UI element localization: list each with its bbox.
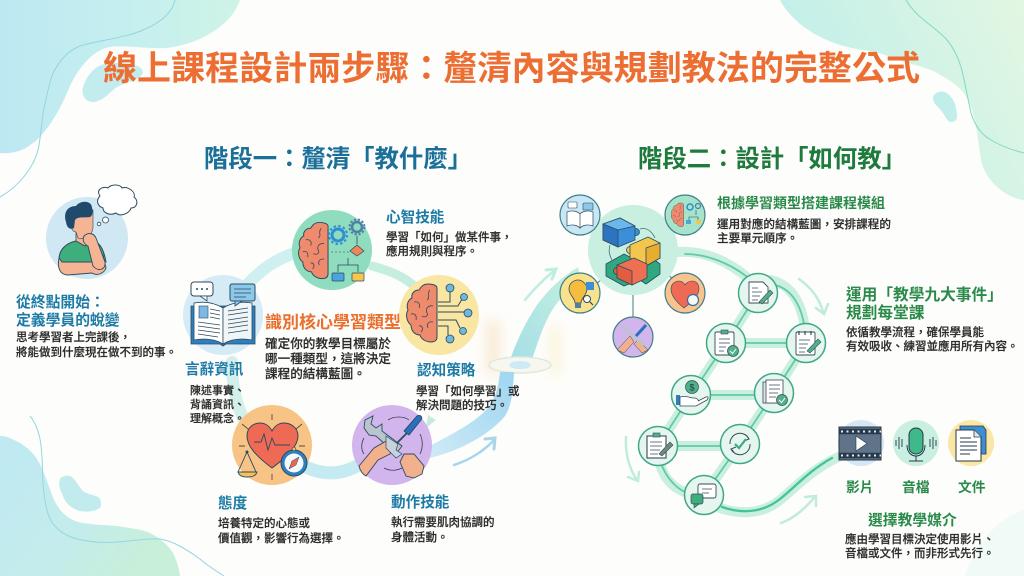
heading: 動作技能 (391, 494, 450, 511)
arrows along the path (626, 279, 828, 523)
icon: thinking learner (46, 185, 137, 279)
portal glow (486, 267, 581, 375)
text block: 身體活動。 (391, 530, 448, 544)
satellite: hands (613, 317, 653, 357)
text block: 音檔或文件，而非形式先行。 (845, 546, 994, 560)
label: audio: 音檔 (902, 479, 930, 495)
heading: 態度 (218, 494, 248, 512)
hub circle (588, 205, 678, 295)
heading: 心智技能 (386, 208, 445, 226)
text block: 思考學習者上完課後， (16, 332, 131, 344)
heading: 選擇教學媒介 (868, 511, 957, 529)
node: hand with coin (672, 376, 710, 414)
satellite: book (560, 195, 600, 235)
panel: cognitive strategies (399, 275, 520, 412)
big blue swoosh to stage two (430, 372, 514, 458)
heading: stage two: 階段二：設計「如何教」 (638, 145, 906, 173)
satellite connectors (595, 226, 676, 318)
text block: 解決問題的技巧。 (416, 398, 508, 412)
title: 線上課程設計兩步驟：釐清內容與規劃教法的完整公式 (103, 50, 920, 88)
text block: 應用規則與程序。 (386, 244, 478, 258)
panel: motor skills (352, 405, 494, 544)
arrow: blue (454, 438, 495, 465)
text block: 背誦資訊、 (190, 397, 245, 411)
satellite: heart (665, 273, 705, 313)
arrow: mint (525, 269, 556, 300)
text block: 哪一種類型，這將決定 (265, 351, 391, 366)
text block: 應由學習目標決定使用影片、 (845, 534, 994, 546)
node: chat bubbles (684, 476, 724, 514)
heading: 根據學習類型搭建課程模組 (717, 195, 885, 211)
node: documents check (754, 374, 794, 412)
node: clipboard check (706, 324, 746, 362)
panel: start from the end (16, 185, 177, 359)
text block: 價值觀，影響行為選擇。 (218, 531, 344, 545)
icon: brain with circuit (399, 275, 479, 355)
heading: stage one: 階段一：釐清「教什麼」 (204, 145, 472, 173)
panel: build course modules hub (560, 195, 891, 357)
panel: attitude (218, 405, 344, 545)
panel: verbal information (183, 275, 263, 425)
node: clipboard pencil (638, 426, 678, 466)
heading: 言辭資訊 (185, 360, 244, 378)
panel: intellectual skills (292, 208, 512, 290)
panel: media selection (838, 420, 994, 560)
node: document with pencil (738, 274, 778, 312)
heading: 規劃每堂課 (846, 303, 925, 322)
icon: puzzle cubes (603, 218, 660, 286)
heading: 從終點開始： (16, 295, 105, 311)
swoosh ring connecting learning types (232, 252, 436, 473)
panel: nine events of instruction nodes (638, 274, 1018, 514)
connector ribbons of nine events path (658, 252, 850, 512)
node: hand with coin: $ (689, 382, 695, 392)
icon: hands with tools (352, 405, 432, 485)
panel: identify core learning type (265, 312, 401, 381)
label: document: 文件 (958, 479, 986, 495)
satellite: brain (665, 195, 705, 235)
text block: 運用對應的結構藍圖，安排課程的 (717, 218, 891, 231)
satellite: lightbulb (560, 273, 600, 313)
text block: 將能做到什麼現在做不到的事。 (16, 345, 177, 359)
icon: film (838, 420, 884, 466)
text block: 學習「如何學習」或 (416, 386, 520, 398)
node: cycle check (720, 424, 760, 464)
text block: 依循教學流程，確保學員能 (846, 327, 984, 339)
heading: 認知策略 (417, 361, 476, 379)
text block: 陳述事實、 (190, 385, 245, 397)
heading: 識別核心學習類型 (265, 312, 401, 332)
text block: 確定你的教學目標屬於 (265, 337, 391, 351)
text block: 主要單元順序。 (717, 231, 798, 245)
text block: 課程的結構藍圖。 (265, 366, 366, 381)
icon: document (948, 420, 994, 466)
heading: 定義學員的蛻變 (16, 311, 120, 329)
text block: 執行需要肌肉協調的 (391, 517, 494, 529)
icon: heart, scale and compass (232, 405, 312, 485)
heading: 運用「教學九大事件」 (846, 287, 1003, 304)
icon: microphone (893, 420, 939, 466)
label: video: 影片 (846, 479, 874, 495)
text block: 理解概念。 (190, 411, 245, 425)
icon: open book (183, 275, 263, 355)
node: notepad (786, 324, 826, 362)
icon: brain and flowchart (292, 210, 372, 290)
text block: 培養特定的心態或 (218, 518, 310, 530)
text block: 學習「如何」做某件事， (386, 232, 512, 244)
text block: 有效吸收、練習並應用所有內容。 (846, 339, 1018, 353)
